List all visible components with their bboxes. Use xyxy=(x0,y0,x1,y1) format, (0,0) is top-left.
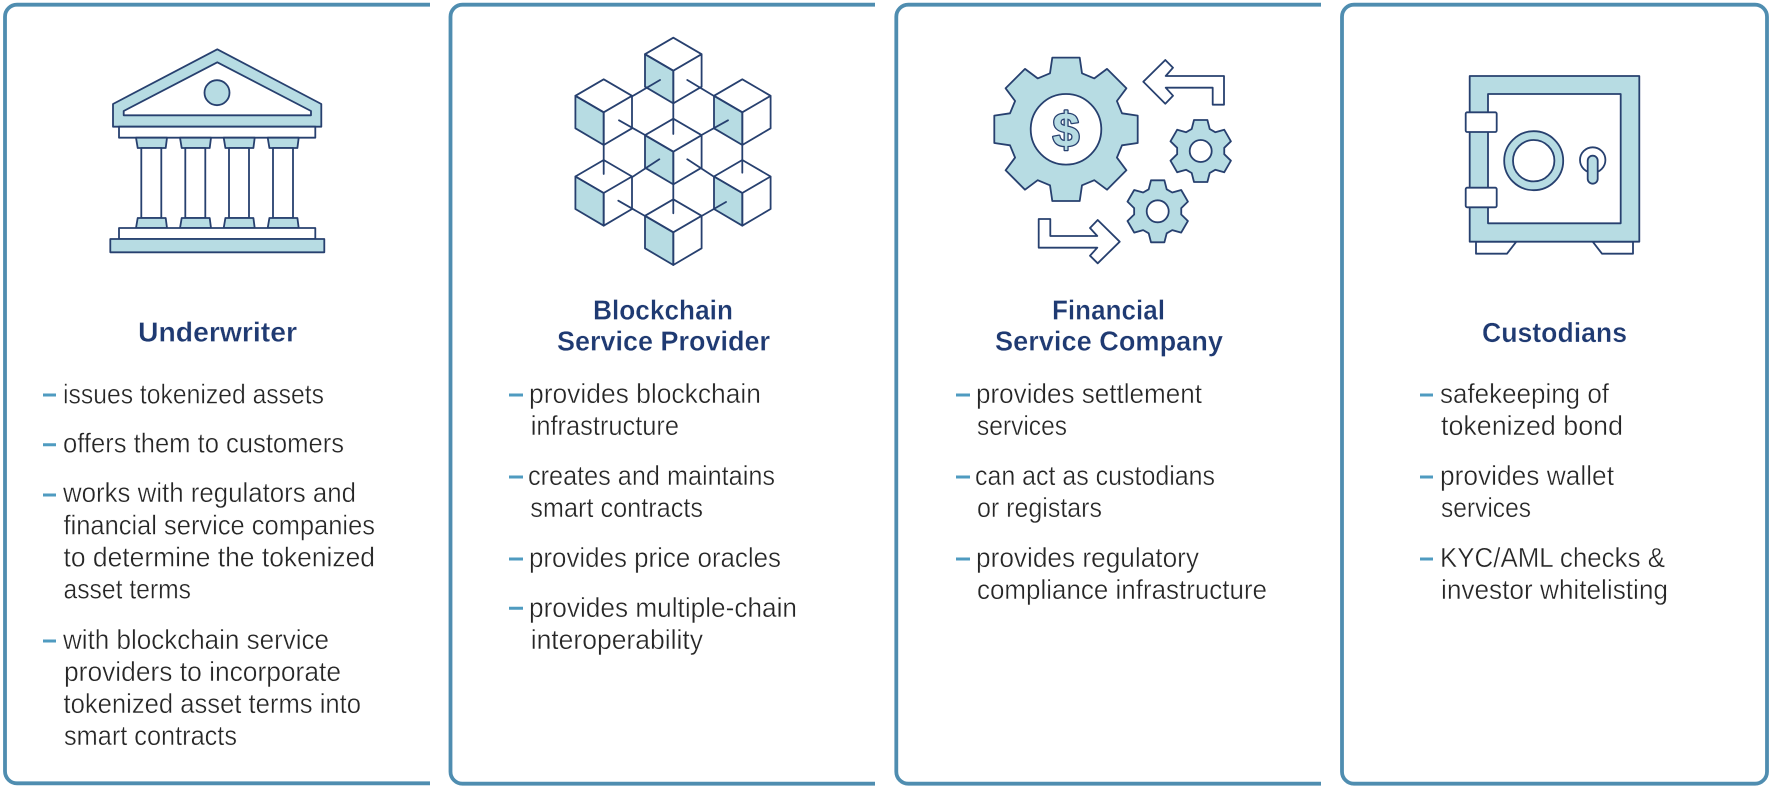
list: underwriter duties: asset terms xyxy=(64,574,191,604)
list: blockchain provider duties: creates and maintains xyxy=(528,460,775,491)
list: custodian duties: KYC/AML checks & xyxy=(1440,542,1665,573)
list: custodian duties: investor whitelisting xyxy=(1441,574,1668,605)
list: financial company duties: services xyxy=(977,410,1067,441)
list: underwriter duties: smart contracts xyxy=(64,720,237,751)
panel border: financial service company xyxy=(896,5,1321,784)
list: custodian duties: tokenized bond xyxy=(1441,410,1623,441)
list: blockchain provider duties: provides price oracles xyxy=(529,542,781,573)
list: financial company duties: provides settlement xyxy=(976,378,1202,409)
list: underwriter duties: with blockchain service xyxy=(62,624,329,655)
icon: bank building xyxy=(110,49,324,252)
large gear with dollar sign: $ xyxy=(1053,104,1080,157)
list: custodian duties: provides wallet xyxy=(1440,460,1614,491)
panel border: custodians xyxy=(1342,5,1767,784)
list: underwriter duties: offers them to customers xyxy=(63,428,344,459)
list: underwriter duties: providers to incorporate xyxy=(64,656,341,687)
list: underwriter duties xyxy=(43,378,375,751)
large gear with dollar sign xyxy=(994,58,1138,201)
list: financial company duties: can act as custodians xyxy=(975,460,1215,491)
heading: blockchain service provider xyxy=(557,294,770,357)
small gear right xyxy=(1170,120,1231,182)
list: financial company duties: or registars xyxy=(977,492,1102,523)
small gear lower xyxy=(1128,180,1188,242)
heading: financial service company: Service Company xyxy=(995,326,1224,357)
icon: blockchain cubes xyxy=(575,38,771,265)
heading: financial service company xyxy=(995,294,1224,357)
list: financial company duties: compliance infrastructure xyxy=(977,574,1267,605)
heading: blockchain service provider: Blockchain xyxy=(593,294,733,325)
list: blockchain provider duties: provides blockchain xyxy=(529,378,761,409)
list: financial company duties xyxy=(956,378,1267,605)
panel: underwriter xyxy=(5,5,430,783)
list: underwriter duties: issues tokenized assets xyxy=(63,378,324,409)
list: custodian duties xyxy=(1420,378,1668,605)
list: underwriter duties: financial service companies xyxy=(64,509,375,540)
list: underwriter duties: tokenized asset terms into xyxy=(64,688,361,719)
list: blockchain provider duties: interoperability xyxy=(531,624,703,655)
panel: blockchain service provider xyxy=(450,5,875,784)
list: blockchain provider duties: smart contracts xyxy=(530,492,703,523)
list: blockchain provider duties: infrastructure xyxy=(531,410,679,441)
heading: underwriter: Underwriter xyxy=(138,317,297,348)
list: blockchain provider duties: provides multiple-chain xyxy=(529,592,797,623)
heading: blockchain service provider: Service Provider xyxy=(557,326,770,357)
arrow: pointing left xyxy=(1143,60,1224,105)
heading: financial service company: Financial xyxy=(1052,294,1165,325)
panel: custodians xyxy=(1342,5,1767,784)
list: financial company duties: provides regulatory xyxy=(976,542,1199,573)
icon: gears and arrows xyxy=(994,58,1231,263)
list: custodian duties: safekeeping of xyxy=(1440,378,1609,409)
list: underwriter duties: to determine the tokenized xyxy=(64,541,375,572)
list: blockchain provider duties xyxy=(509,378,797,655)
icon: safe xyxy=(1466,76,1639,254)
panel: financial service company xyxy=(896,5,1321,784)
arrow: pointing right xyxy=(1039,219,1120,263)
heading: custodians: Custodians xyxy=(1482,317,1627,348)
list: custodian duties: services xyxy=(1441,492,1531,523)
list: underwriter duties: works with regulators and xyxy=(62,477,356,508)
panel border: underwriter xyxy=(5,5,430,783)
panel border: blockchain service provider xyxy=(450,5,875,784)
